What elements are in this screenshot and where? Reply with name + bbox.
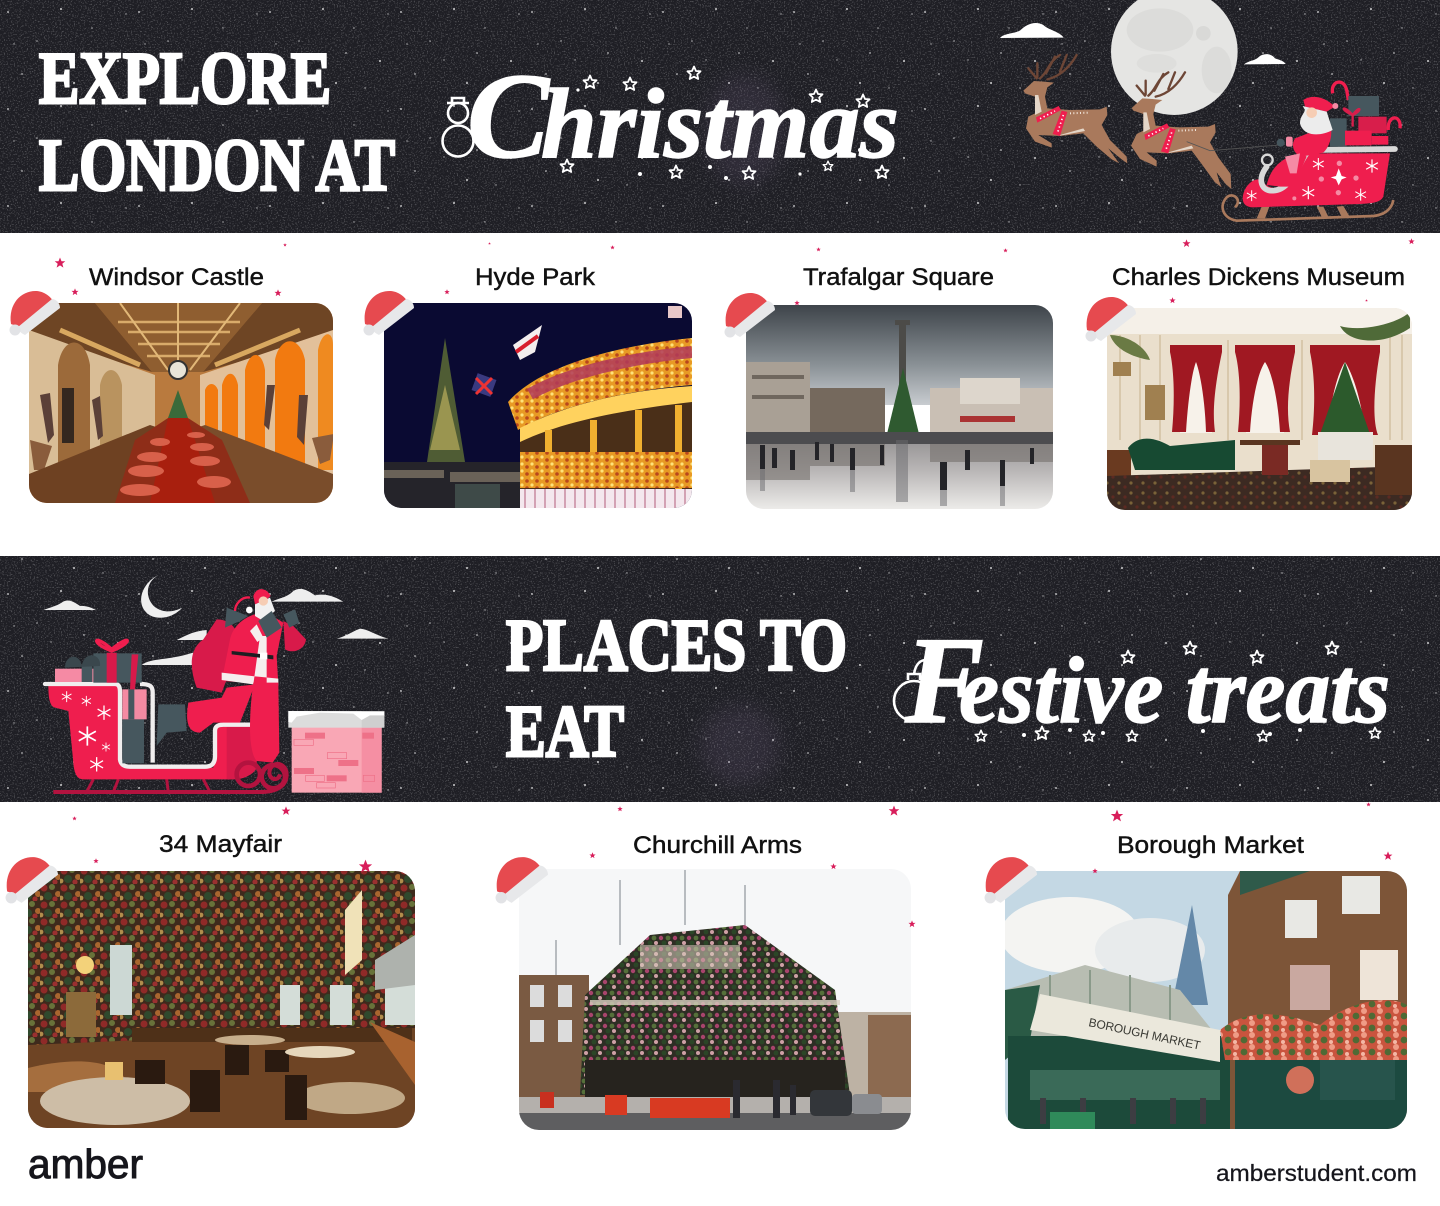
illustration: santa climbing to chimney <box>43 575 388 793</box>
icon: clouds <box>1000 23 1286 64</box>
decorative flowers around festive treats <box>975 642 1381 741</box>
label: Hyde Park <box>475 264 596 291</box>
photo: 34 mayfair <box>28 871 415 1128</box>
website url: amberstudent.com <box>1216 1160 1417 1186</box>
icon: reindeer two <box>1131 72 1231 189</box>
icon: gifts <box>55 640 142 689</box>
heading: explore london at: EXPLORE <box>39 38 331 120</box>
icon: santa hat <box>496 857 548 903</box>
card: hyde park <box>364 264 692 508</box>
icon: santa with sack <box>157 589 306 763</box>
label: Churchill Arms <box>633 832 802 859</box>
card: windsor castle <box>10 264 334 503</box>
photo: borough market: BOROUGH MARKET <box>1087 1015 1202 1053</box>
panel: bottom banner <box>0 556 1440 802</box>
reins <box>1187 142 1280 151</box>
icon: sleigh <box>45 684 287 792</box>
card: charles dickens museum <box>1086 264 1412 510</box>
label: 34 Mayfair <box>159 831 282 858</box>
icon: santa hat <box>10 291 60 336</box>
photo: borough market <box>1000 871 1407 1129</box>
photo: windsor castle <box>29 303 334 503</box>
panel: top banner <box>0 0 1440 233</box>
label: Borough Market <box>1117 832 1304 859</box>
decorative red stars <box>55 238 1415 927</box>
photo: hyde park <box>384 303 692 508</box>
icon: sleigh <box>1223 149 1395 221</box>
heading: explore london at <box>39 38 395 207</box>
heading: places to eat: PLACES TO <box>506 605 847 687</box>
logo: amber: amber <box>28 1141 143 1187</box>
script heading: festive treats: Festive treats <box>904 612 1390 749</box>
heading: places to eat <box>506 605 847 773</box>
script heading: christmas: Christmas <box>467 49 899 184</box>
icon: santa hat <box>364 291 414 336</box>
card: trafalgar square <box>724 264 1053 509</box>
icon: bauble <box>894 660 934 721</box>
photo: charles dickens museum <box>1107 308 1412 510</box>
icon: gifts <box>1330 82 1400 147</box>
icon: santa hat <box>724 293 775 338</box>
icon: santa hat <box>6 857 58 903</box>
label: Charles Dickens Museum <box>1112 264 1405 291</box>
illustration: reindeer and sleigh with moon <box>1000 0 1400 221</box>
heading: explore london at: LONDON AT <box>39 125 395 207</box>
icon: moon <box>1111 0 1238 115</box>
photo: churchill arms <box>519 869 911 1130</box>
icon: crescent moon <box>141 575 182 618</box>
heading: places to eat: EAT <box>506 691 624 773</box>
icon: clouds <box>43 589 388 665</box>
icon: reindeer one <box>1023 55 1127 163</box>
icon: snowman <box>442 98 474 156</box>
icon: santa <box>1267 97 1338 187</box>
label: Windsor Castle <box>89 264 264 291</box>
photo: trafalgar square <box>746 305 1053 509</box>
icon: santa hat <box>1086 297 1136 342</box>
icon: santa hat <box>985 857 1037 903</box>
card: 34 mayfair <box>6 831 415 1128</box>
card: borough market <box>985 832 1407 1129</box>
icon: chimney <box>288 711 384 793</box>
label: Trafalgar Square <box>803 264 994 291</box>
decorative flowers around christmas <box>560 66 888 180</box>
card: churchill arms <box>496 832 911 1130</box>
